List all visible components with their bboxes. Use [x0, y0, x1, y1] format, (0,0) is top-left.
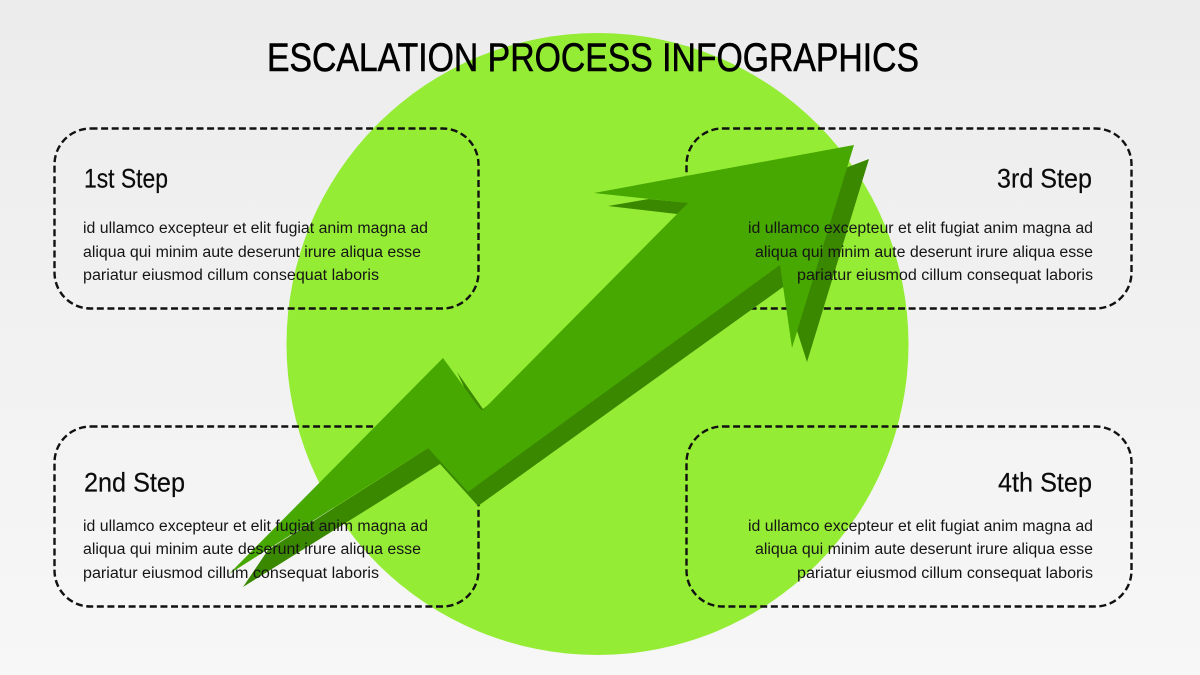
step 4 text: 4th Step: [998, 468, 1092, 498]
growth arrow: [229, 145, 869, 587]
step 1 text: pariatur eiusmod cillum consequat laboris: [83, 267, 379, 284]
arrow body: [229, 145, 854, 574]
step 4 text: aliqua qui minim aute deserunt irure aliqua esse: [755, 541, 1093, 558]
step 3 text: 3rd Step: [997, 164, 1092, 194]
step 4 text: pariatur eiusmod cillum consequat laboris: [797, 565, 1093, 582]
step 2 text: pariatur eiusmod cillum consequat laboris: [83, 565, 379, 582]
step 2 text: aliqua qui minim aute deserunt irure aliqua esse: [83, 541, 421, 558]
step 2 text: 2nd Step: [84, 468, 185, 498]
dashed frames for the four steps: [54, 128, 1132, 606]
step 1 text: [83, 164, 428, 284]
step 2 text: id ullamco excepteur et elit fugiat anim magna ad: [83, 518, 428, 535]
step 4 text: [748, 468, 1093, 582]
background circle: [286, 33, 908, 655]
step 4 text: id ullamco excepteur et elit fugiat anim magna ad: [748, 518, 1093, 535]
step 1 text: 1st Step: [84, 164, 168, 194]
arrow shadow: [243, 159, 869, 587]
step 3 text: id ullamco excepteur et elit fugiat anim magna ad: [748, 220, 1093, 237]
step 3 text: pariatur eiusmod cillum consequat laboris: [797, 267, 1093, 284]
step 1 text: aliqua qui minim aute deserunt irure aliqua esse: [83, 244, 421, 261]
step 3 text: [748, 164, 1093, 284]
step 2 text: [83, 468, 428, 582]
step 3 text: aliqua qui minim aute deserunt irure aliqua esse: [755, 244, 1093, 261]
title: ESCALATION PROCESS INFOGRAPHICS: [267, 36, 919, 80]
step 1 text: id ullamco excepteur et elit fugiat anim magna ad: [83, 220, 428, 237]
